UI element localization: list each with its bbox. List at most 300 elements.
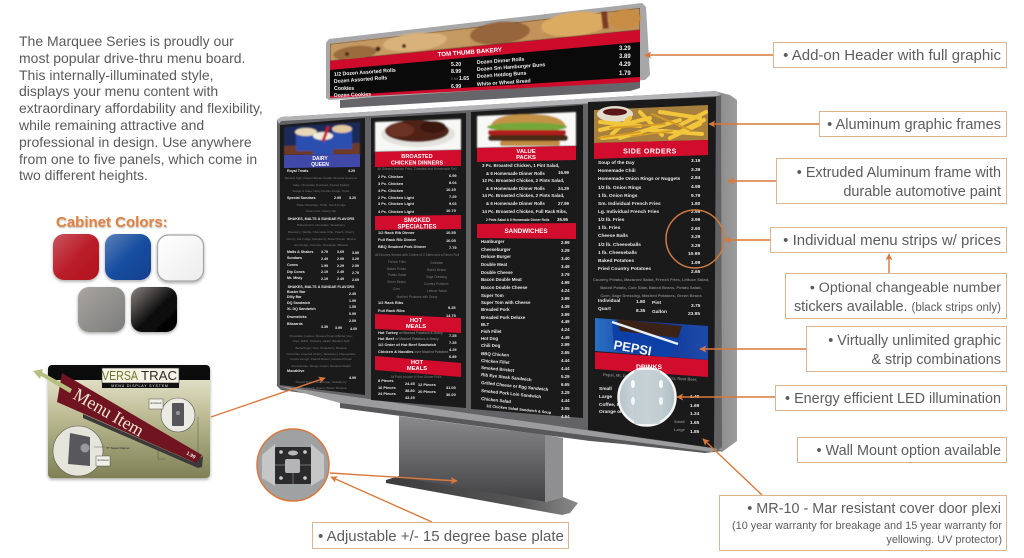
side orders text (593, 158, 709, 317)
broasted menu text: 10.25 (446, 187, 457, 192)
broasted menu text: Sage Dressing (426, 275, 447, 279)
broasted menu text: Potato Salad (388, 273, 406, 277)
drinks text (599, 372, 700, 435)
drinks text: Pepsi, Mt. Dew, Diet Pepsi, Sierra Mist, Root Beer, (603, 372, 697, 382)
side orders text: Homemade Chili (598, 168, 636, 174)
side orders text: Country Potato, Macaroni Salad, French Fries, Lettuce Salad, (593, 277, 709, 282)
value packs and sandwiches text: & 6 Homemade Dinner Rolls (486, 171, 545, 176)
value packs and sandwiches text: 16.99 (558, 170, 570, 175)
side orders banner (594, 140, 708, 159)
menu strip graphic (57, 373, 203, 468)
value packs title: PACKS (516, 155, 536, 161)
side orders text: Cheese Balls (598, 233, 628, 239)
broasted menu text: Country Potatoes (424, 282, 449, 286)
callout: graphic combinations: & strip combinations (871, 352, 1001, 368)
side orders text: 1/2 lb. Fries (598, 217, 625, 223)
drinks text: Small (674, 419, 685, 424)
drinks text: Coffee, Iced Tea (599, 402, 636, 408)
drinks text: Large (599, 394, 612, 400)
large detail circle (53, 426, 110, 476)
dairy queen menu text: 3.69 (337, 250, 344, 254)
value packs and sandwiches text: 4.49 (561, 335, 570, 340)
intro paragraph: The Marquee Series is proudly our (19, 33, 234, 49)
broasted menu text: 9.03 (449, 201, 457, 206)
value packs and sandwiches text: & 6 Homemade Dinner Rolls (486, 201, 545, 206)
broasted menu text: Baked Beans (427, 268, 446, 272)
callout: LED (776, 386, 1006, 410)
cabinet color swatches (53, 234, 204, 332)
dairy queen menu text: XL DQ Sandwich (287, 307, 316, 311)
header menu text: 4.29 (619, 62, 631, 68)
broasted menu text: 2 Pc. Chicken (378, 174, 404, 179)
dairy queen menu text: Cookie Dough, Peanut Buster, Caramel Pecan (290, 357, 352, 361)
drinks text: 1.69 (690, 403, 700, 409)
broasted menu text: 2 Pc. Chicken Light (378, 195, 415, 200)
dairy queen menu text: 2.19 (321, 277, 328, 281)
value packs and sandwiches text: 24.29 (558, 186, 570, 191)
dairy queen menu text (285, 169, 359, 390)
callout: plexi: (10 year warranty for breakage and 15 year warranty for (732, 520, 1002, 532)
dairy queen menu text: Banana Split, Peanut Buster Parfait, Brownie Supreme (285, 176, 358, 180)
callout: graphic frames: • Aluminum graphic frames (827, 117, 1001, 133)
value packs and sandwiches text: Smoked Brisket (481, 365, 515, 373)
dairy queen menu text: Drumsticks (287, 315, 307, 319)
side orders text: Baked Potato, Cole Slaw, Baked Beans, Potato Salad, (600, 285, 702, 290)
value packs and sandwiches text: Fish Fillet (481, 329, 502, 334)
magnet note: VT Super Magnet (106, 446, 130, 450)
value packs and sandwiches text: Chili Dog (481, 343, 501, 348)
dairy queen banner (284, 154, 360, 168)
broasted menu text: 1/2 Order of Hot Beef Sandwich (378, 342, 437, 347)
arrow: add-on header (645, 54, 773, 56)
drinks text: 1.49 (690, 394, 700, 400)
intro paragraph: extraordinary affordability and flexibility, (19, 100, 263, 116)
smoked banner (375, 215, 461, 230)
intro paragraph: while remaining attractive and (18, 117, 204, 133)
value packs and sandwiches text: 3.29 (561, 390, 570, 395)
hot meals title: HOT (410, 318, 423, 324)
drinks text: Orange or Apple Milk (599, 409, 647, 415)
strip arrow (33, 369, 72, 393)
broasted menu text: 14.75 (446, 313, 457, 318)
dairy queen menu text: Mocahlive (287, 369, 304, 373)
callout: plexi (720, 496, 1006, 550)
broasted menu text: 36.00 (446, 392, 456, 397)
VersaTrac logo: TRAC (141, 368, 177, 383)
hot meals banner (375, 314, 461, 333)
broasted menu text: Hot Beef w/ Mashed Potatoes & Gravy (378, 336, 439, 341)
cabinet side (716, 92, 737, 452)
broasted menu text: Chicken & Noodles over Mashed Potatoes (378, 349, 449, 354)
value packs and sandwiches text: Breaded Pork (481, 307, 510, 312)
broasted menu text: All Pails Include 6 Free Dinner Rolls (391, 375, 442, 379)
value packs and sandwiches text: Super Tom with Cheese (481, 300, 531, 305)
arrows (211, 55, 889, 522)
value packs and sandwiches text: 4.99 (561, 280, 570, 285)
dairy queen menu text: 3.20 (349, 196, 356, 200)
broasted menu text: Mashed Potatoes with Gravy (397, 295, 438, 299)
header menu text: Dozen Cookies (334, 92, 371, 99)
header menu text: Dozen Hotdog Buns (477, 71, 527, 80)
dairy queen menu text: Buster Bar (287, 290, 306, 294)
broasted menu text: All Dinners Include Fries, Coleslaw and Homemade Roll (377, 167, 457, 171)
side orders text: 3.39 (691, 167, 701, 173)
dairy queen menu text: Royal Treats (287, 169, 308, 173)
value packs and sandwiches text: Hot Dog (481, 336, 498, 341)
dairy queen menu text: 4.29 (348, 169, 355, 173)
side orders title: SIDE ORDERS (623, 148, 677, 156)
side orders text: Baked Potatoes (598, 258, 634, 264)
arrow: LED (677, 396, 775, 398)
value packs and sandwiches text: 12 Pc. Broasted Chicken, 2 Pints Salad, (482, 178, 564, 183)
broasted menu text: Green Beans (387, 280, 406, 284)
panel: value packs and sandwiches (471, 105, 583, 419)
side orders text: Fried Country Potatoes (598, 266, 651, 272)
smoked title: SMOKED (404, 218, 431, 224)
hot meals 2 title: HOT (411, 360, 424, 366)
value packs and sandwiches text: 6.65 (561, 382, 570, 387)
side orders text: 2.65 (691, 269, 701, 275)
drinks text: 1.24 (690, 411, 700, 417)
side orders text: Individual (598, 298, 620, 304)
value packs and sandwiches text: 3.79 (561, 272, 570, 277)
dairy queen menu text: Special Sundaes (287, 196, 316, 200)
value packs and sandwiches text: Breaded Pork Deluxe (481, 315, 526, 320)
dairy queen menu text: 2.19 (321, 270, 328, 274)
broasted menu text: Lettuce Salad (427, 289, 447, 293)
dairy queen menu text: Blizzards (287, 322, 303, 326)
hot meals title: MEALS (406, 324, 426, 330)
value packs and sandwiches text: Bacon Double Meat (481, 277, 522, 282)
header food photo (330, 7, 642, 62)
dairy queen photo (284, 122, 360, 155)
broasted menu text: 43.25 (405, 395, 416, 400)
VersaTrac logo: VERSA (102, 368, 138, 383)
broasted menu text: Baked Potato (387, 267, 406, 271)
arrow: base plate to pedestal (330, 473, 457, 481)
side orders text: 1/2 lb. Cheeseballs (598, 242, 641, 248)
side orders text: Corn, Sage Dressing, Mashed Potatoes, Green Beans (600, 293, 702, 298)
value packs title: VALUE (516, 149, 536, 155)
burger photo (477, 112, 576, 148)
arrow: plexi (703, 439, 762, 495)
side orders text: 3.99 (691, 217, 701, 223)
header menu text: 2 for 1.65 (451, 76, 469, 82)
dairy queen menu text: Cheesecake, Mango Cream, Banana Delight (291, 364, 351, 368)
dairy queen menu text: Butterscotch, Chocolate, Strawberry (297, 223, 346, 227)
header menu text: 1/2 Dozen Assorted Rolls (334, 68, 396, 78)
broasted menu text: 38.80 (405, 388, 415, 393)
dairy queen menu text: 3.79 (321, 250, 328, 254)
hot meals 2 title: MEALS (407, 366, 427, 372)
header banner title: TOM THUMB BAKERY (438, 46, 502, 59)
value packs and sandwiches text: 14 Pc. Broasted Chicken, Full Rack Ribs, (482, 209, 567, 214)
callout: LED: • Energy efficient LED illumination (785, 391, 1001, 407)
cabinet colors heading: Cabinet Colors: (56, 214, 168, 231)
callout: graphic combinations (806, 326, 1006, 372)
value packs and sandwiches text: 3.49 (561, 264, 570, 269)
dairy queen menu text: DQ Sandwich (287, 301, 310, 305)
side orders text: 2.99 (691, 209, 701, 215)
callout: extruded frame (776, 158, 1006, 204)
side orders text: 8.35 (636, 308, 646, 314)
callout: menu strips (770, 228, 1006, 252)
value packs and sandwiches text: Double Meat (481, 262, 508, 267)
value packs and sandwiches text: 3.99 (561, 296, 570, 301)
broasted menu text: Hot Turkey w/ Mashed Potatoes & Gravy (378, 330, 443, 335)
dairy queen menu text: Cake, Chocolate Overload, Peanut Delight (293, 183, 349, 187)
dairy queen menu text: 2.49 (337, 277, 344, 281)
dairy queen menu text: Mr. Misty (287, 276, 302, 280)
broasted title: BROASTED (401, 154, 433, 160)
main cabinet (277, 91, 737, 453)
broasted menu text: 4 Pc. Chicken (378, 188, 404, 193)
broasted menu text: All Dinners Served with Choice of 2 Sides and a Dinner Roll (375, 253, 459, 257)
menu strip graphic: Menu Item (70, 384, 148, 440)
drinks text: 1.65 (690, 420, 700, 426)
base plate detail circle (257, 429, 329, 501)
side orders text: 3.29 (691, 243, 701, 249)
value packs and sandwiches text: 2.65 (561, 350, 570, 355)
side orders text: 3.19 (691, 158, 701, 164)
value packs and sandwiches text: Hamburger (481, 239, 505, 244)
broasted menu text: 16 Pieces (378, 385, 396, 390)
side orders text: 2.60 (691, 226, 701, 232)
VersaTrac logo: MENU DISPLAY SYSTEM (111, 384, 169, 388)
dairy queen menu text: Hot Fudge, Coconut, Pineapple, Banana (294, 243, 348, 247)
callout: wall mount: • Wall Mount option available (816, 443, 1001, 459)
arrow: label to base circle (331, 477, 432, 522)
header red banner (330, 30, 640, 70)
dairy queen title: DAIRY (312, 156, 328, 162)
dairy queen menu text: Cookie Dough, Peanut Butter, Banana (296, 386, 347, 390)
side orders text: 1 lb. Fries (598, 225, 621, 231)
value packs and sandwiches text: 14 Pc. Broasted Chicken, 2 Pints Salad, (482, 193, 564, 198)
dairy queen menu text: Choco Nut, Cherry Dip (306, 209, 336, 213)
callout: wall mount (798, 438, 1006, 462)
value packs and sandwiches text: 4.44 (561, 358, 570, 363)
value packs and sandwiches text: & 6 Homemade Dinner Rolls (486, 186, 545, 191)
header bottom red strip (330, 77, 640, 98)
arrow: graphic frames (709, 123, 819, 125)
drinks text: Large (674, 427, 686, 432)
header menu text: 3.29 (619, 46, 631, 52)
dairy queen title: QUEEN (311, 162, 329, 168)
callout: plexi: yellowing. UV protector) (886, 534, 1002, 546)
value packs and sandwiches text: 4.24 (561, 288, 570, 293)
dairy queen menu text: Oreo, M&M, Snickers, Heath, Banana Split (293, 339, 350, 343)
dairy queen menu text: Peanut Buster, Hot Fudge, Strawberry (296, 380, 347, 384)
dairy queen menu text: 2.59 (352, 264, 359, 268)
dairy queen menu text: Cherry, Hot Fudge, Raspberry, Butter Pecan, Mocha (286, 237, 356, 241)
broasted title: CHICKEN DINNERS (391, 160, 443, 166)
side orders text: Gallon (652, 309, 667, 315)
intro paragraph: two different heights. (19, 167, 148, 183)
broasted menu text: Full Rack Ribs (378, 308, 405, 313)
callout: menu strips: • Individual menu strips w/ prices (783, 232, 1001, 249)
dairy queen menu text: SHAKES, MALTS & SUNDAE FLAVORS (288, 217, 355, 221)
broasted menu text: 8 Pieces (378, 378, 394, 383)
side orders text: 1 lb. Cheeseballs (598, 250, 637, 256)
broasted menu text: French Fries (388, 260, 406, 264)
broasted menu text: 4.29 (449, 347, 457, 352)
sandwiches banner (477, 223, 576, 239)
VersaTrac strip detail card (33, 365, 210, 478)
side orders text: 23.95 (688, 311, 700, 317)
dairy queen menu text: 2.79 (352, 271, 359, 275)
broasted menu text: 4 Pc. Chicken Light (378, 209, 415, 214)
value packs banner (477, 146, 576, 162)
fries photo (594, 105, 708, 143)
header menu text: Dozen Dinner Rolls (477, 57, 525, 66)
panel: side orders and drinks (588, 97, 716, 448)
side orders text: 10.99 (688, 251, 700, 257)
dairy queen menu text: 2.49 (321, 257, 328, 261)
callout: plexi: • MR-10 - Mar resistant cover door plexi (747, 501, 1001, 517)
dairy queen menu text: Chocolate Cookies, Reeses Peanut Butter Cup, (289, 334, 353, 338)
value packs and sandwiches text: BLT (481, 322, 490, 327)
intro paragraph: displays your menu content with (19, 83, 218, 99)
broasted menu text: 24.45 (405, 381, 416, 386)
dairy queen menu text: Triple Chocolate, Turtle, Nut & Fudge (296, 203, 346, 207)
broasted menu text: 6.99 (449, 173, 457, 178)
dairy queen menu text: 2.09 (349, 319, 356, 323)
arrow: number stickers (888, 254, 890, 273)
value packs and sandwiches text: 27.99 (558, 201, 570, 206)
broasted menu text: Full Rack Rib Dinner (378, 237, 417, 242)
value packs and sandwiches text: 2 Pints Salad & 8 Homemade Dinner Rolls (486, 218, 550, 222)
dairy queen menu text: Cones (287, 263, 298, 267)
value packs and sandwiches text: Bacon Double Cheese (481, 285, 528, 290)
value packs and sandwiches text: BBQ Chicken (481, 351, 510, 357)
drinks title: DRINKS (636, 364, 662, 371)
dairy queen menu text: Blueberry, Vanilla, Chocolate Chip, Peach, Cherry (288, 230, 355, 234)
add-on header sign (326, 3, 650, 100)
dairy queen menu text: Dilly Bar (287, 295, 302, 299)
value packs and sandwiches text: 4.44 (561, 366, 570, 371)
sandwiches title: SANDWICHES (504, 228, 548, 235)
dairy queen menu text: Sundaes (287, 256, 302, 260)
broasted menu text: 3 Pc. Chicken (378, 181, 404, 186)
callout: add-on header: • Add-on Header with full graphic (783, 47, 1001, 64)
header menu text: White or Wheat Bread (477, 78, 531, 88)
callout: number stickers: • Optional changeable number (810, 280, 1001, 296)
header menu text: 8.99 (451, 69, 461, 75)
arrow: menu strips (725, 239, 770, 241)
callout: graphic frames (820, 112, 1006, 136)
VersaTrac logo (102, 368, 179, 388)
panel: dairy queen (280, 118, 365, 395)
dairy queen menu text: 1.99 (321, 264, 328, 268)
pepsi photo: PEPSI (612, 337, 653, 359)
side orders text: 3.75 (691, 303, 701, 309)
dairy queen menu text: Dip Cones (287, 270, 305, 274)
side orders text: 2.84 (691, 175, 701, 181)
broasted menu text: 20 Pieces (418, 389, 436, 394)
callout: graphic combinations: • Virtually unlimited graphic (828, 333, 1001, 349)
broasted menu text: BBQ Smoked Pork Dinner (378, 244, 426, 249)
dairy queen menu text: 2.69 (352, 278, 359, 282)
broasted menu text: 7.29 (449, 194, 457, 199)
callout: base plate: • Adjustable +/- 15 degree base plate (318, 528, 564, 545)
LED illumination detail circle (618, 368, 676, 426)
intro paragraph: professional in design. Use anywhere (19, 134, 252, 150)
broasted menu text: 24 Pieces (378, 391, 396, 396)
header menu text: Cookies (334, 86, 354, 92)
header sign connector (340, 72, 640, 108)
side orders text: 9.79 (691, 193, 701, 199)
broasted menu text: 12 Pieces (418, 382, 436, 387)
header menu text (334, 46, 631, 99)
dairy queen menu text: 2.99 (334, 196, 341, 200)
value packs and sandwiches text: Super Tom (481, 293, 504, 298)
value packs and sandwiches text: 35.95 (557, 217, 569, 222)
side orders text: Quart (598, 306, 611, 312)
side orders text: 1.80 (691, 201, 701, 207)
dairy queen menu text: 3.99 (335, 326, 342, 330)
value packs and sandwiches text: Grilled Cheese or Egg Sandwich (481, 380, 549, 392)
arrow: VersaTrac (211, 378, 325, 417)
broasted menu text: 1/2 Rack Rib Dinner (378, 230, 415, 235)
value packs and sandwiches text: 4.39 (561, 304, 570, 309)
value packs and sandwiches text: 3 Pc. Broasted Chicken, 1 Pint Salad, (482, 163, 559, 168)
dairy queen menu text: 4.69 (350, 327, 357, 331)
intro paragraph (18, 33, 263, 183)
side orders text: 1/2 lb. Onion Rings (598, 185, 642, 191)
individual menu strips highlight circle (666, 210, 724, 268)
dairy queen menu text: 1.59 (349, 305, 356, 309)
side orders text: 1.99 (691, 260, 701, 266)
side orders text: Homemade Onion Rings or Nuggets (598, 176, 681, 182)
value packs and sandwiches text (481, 163, 570, 419)
value packs and sandwiches text: Smoked Pork Loin Sandwich (481, 388, 542, 399)
callout: number stickers: stickers available. (black strips only) (794, 299, 1001, 315)
value packs and sandwiches text: 4.24 (561, 327, 570, 332)
broasted menu text: 16.05 (446, 238, 457, 243)
header menu text: 3.89 (619, 54, 631, 60)
broasted menu text: Corn (393, 287, 400, 291)
ribs photo (375, 119, 461, 152)
arrow: extruded frame (728, 180, 776, 182)
callout: extruded frame: durable automotive paint (843, 184, 1001, 200)
value packs and sandwiches text: Deluxe Burger (481, 254, 511, 259)
side orders text: 3.29 (691, 234, 701, 240)
value packs and sandwiches text: 4.44 (561, 398, 570, 403)
value packs and sandwiches text: Chicken Fillet (481, 358, 510, 365)
menu strip graphic: 1.99 (185, 451, 197, 461)
header menu text: Dozen Sm Hamburger Buns (477, 62, 546, 73)
value packs and sandwiches text: 1/2 Chicken Salad Sandwich & Soup (486, 404, 552, 415)
side orders text: 1.80 (636, 299, 646, 305)
side orders text: 1 lb. Onion Rings (598, 193, 638, 199)
value packs and sandwiches text: 3.29 (561, 248, 570, 253)
side orders text: Soup of the Day (598, 160, 635, 166)
broasted menu text: 8.04 (449, 180, 457, 185)
broasted menu text: 1/2 Rack Ribs (378, 300, 403, 305)
value packs and sandwiches text: Rib Eye Steak Sandwich (481, 372, 532, 382)
dairy queen menu text: 3.89 (352, 251, 359, 255)
broasted menu text: 10.55 (446, 230, 457, 235)
callout: number stickers (786, 274, 1006, 318)
hot meals 2 banner (375, 356, 461, 377)
dairy queen menu text: Chocolate Covered Cherry, Strawberry Cheesecake (287, 352, 356, 356)
header menu text: 5.20 (451, 62, 461, 68)
value packs and sandwiches text: 3.05 (561, 406, 570, 411)
value packs and sandwiches text: 2.99 (561, 342, 570, 347)
dairy queen menu text: 3.39 (321, 325, 328, 329)
broasted menu text: 10.79 (446, 208, 457, 213)
dairy queen menu text: 1.99 (349, 299, 356, 303)
